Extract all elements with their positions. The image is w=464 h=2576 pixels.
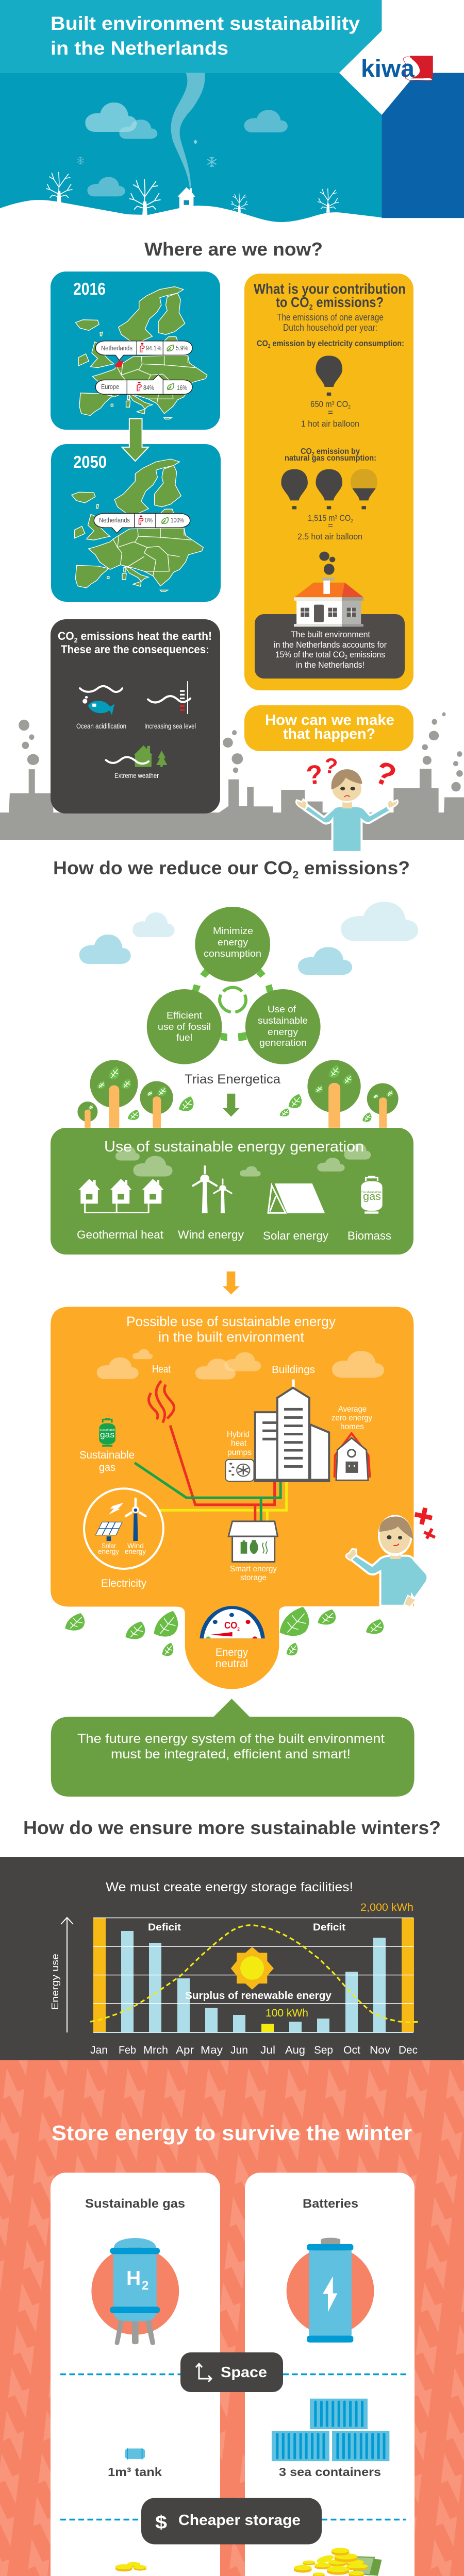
icon: sun — [231, 1947, 274, 1990]
axis: energy use: Energy use — [50, 1954, 60, 2010]
person with question marks: ? — [370, 754, 401, 794]
panel: consequences — [51, 619, 220, 814]
panel: 2050 map — [51, 444, 221, 602]
trias energetica diagram: energy — [218, 937, 248, 947]
panel: consequences: 2 — [74, 636, 78, 644]
callout: netherlands 2016: 84% — [143, 384, 154, 392]
month labels — [90, 2044, 418, 2056]
label: space — [180, 2352, 283, 2392]
label: cheaper storage: $ — [155, 2512, 167, 2533]
arrow: generation to use — [223, 1272, 240, 1294]
icon: ocean acidification — [80, 686, 122, 715]
gas emission: 2.5 hot air balloon — [297, 532, 362, 541]
panel: consequences: Increasing sea level — [144, 722, 196, 730]
callout: integrated efficient smart — [51, 1699, 415, 1797]
panel: possible use of sustainable energy: Energy — [216, 1647, 248, 1658]
callout: netherlands 2016: 94.1% — [146, 345, 161, 352]
heading: where are we now: Where are we now? — [144, 239, 323, 260]
panel: possible use of sustainable energy: Hybrid — [227, 1430, 250, 1439]
callout: integrated efficient smart: The future energy system of the built environment — [77, 1732, 385, 1746]
icon: electricity circle: energy — [125, 1548, 146, 1555]
person pointing up — [346, 1508, 435, 1607]
title: Built environment sustainability — [51, 13, 360, 34]
contribution heading: 2 — [309, 303, 313, 312]
callout: netherlands 2016 — [101, 345, 188, 392]
built environment box: in the Netherlands accounts for — [274, 640, 387, 650]
panel: possible use of sustainable energy: neutral — [216, 1658, 248, 1670]
contribution heading — [254, 281, 406, 312]
arrow: 2016 to 2050 — [122, 418, 148, 461]
panel: possible use of sustainable energy: homes — [340, 1422, 364, 1431]
person with question marks: ? — [323, 753, 339, 778]
built environment box: emissions — [347, 650, 385, 659]
month labels: Mrch — [143, 2044, 168, 2056]
dashed dividers — [60, 2374, 406, 2519]
callout: netherlands 2016: Europe — [101, 383, 119, 391]
label: cheaper storage — [141, 2498, 322, 2544]
panel: possible use of sustainable energy: Possible use of sustainable energy — [126, 1314, 336, 1329]
icon: gas bottle: Sustainable — [361, 1191, 382, 1194]
intro text: Dutch household per year: — [283, 323, 377, 333]
panel: sustainable energy generation: Solar energy — [263, 1229, 328, 1242]
panel: consequences: These are the consequences: — [61, 643, 209, 656]
header illustration — [0, 0, 464, 222]
gas emission: natural gas consumption: — [285, 454, 376, 463]
month labels: Feb — [119, 2044, 136, 2056]
electricity emission: CO — [257, 338, 270, 348]
electricity emission: 1 hot air balloon — [301, 419, 359, 429]
electricity emission — [257, 338, 404, 429]
panel: possible use of sustainable energy: storage — [240, 1573, 267, 1582]
trias energetica diagram: fuel — [176, 1032, 192, 1043]
panel: co2 contribution — [244, 274, 413, 690]
month labels: Dec — [399, 2044, 418, 2056]
built environment box: 15% of the total CO — [275, 650, 352, 659]
trias energetica diagram: Minimize — [213, 925, 253, 936]
panel: energy storage chart — [0, 1857, 464, 2060]
panel: possible use of sustainable energy: in the built environment — [158, 1329, 304, 1345]
panel: consequences: Extreme weather — [114, 772, 159, 779]
trias energetica diagram: use of fossil — [158, 1021, 211, 1032]
icon: green gas bottle: Sustainable — [100, 1429, 115, 1432]
icon: co2 gauge — [200, 1606, 265, 1638]
card: sustainable gas: 1m³ tank — [108, 2465, 162, 2479]
card: sustainable gas: Sustainable gas — [85, 2197, 185, 2211]
icon: coins small — [115, 2562, 146, 2571]
icon: electricity circle: Wind — [127, 1542, 144, 1550]
card: batteries — [245, 2173, 415, 2576]
panel: energy storage chart: We must create energy storage facilities! — [106, 1880, 353, 1894]
electricity emission: 2 — [268, 344, 271, 349]
callout: netherlands 2016: 5.9% — [176, 345, 188, 352]
panel: possible use of sustainable energy: Buildings — [272, 1364, 315, 1376]
panel: sustainable energy generation: Wind energy — [178, 1228, 244, 1241]
month labels: Nov — [370, 2044, 391, 2056]
icon: solar — [268, 1183, 325, 1213]
heading: reduce co2: emissions? — [299, 857, 410, 878]
panel: sustainable energy generation: Use of sustainable energy generation — [104, 1139, 364, 1155]
bar chart: Deficit — [313, 1922, 346, 1933]
month labels: Jun — [230, 2044, 248, 2056]
callout: netherlands 2016: 16% — [177, 384, 187, 392]
callout: how can we make that happen — [244, 705, 413, 751]
title — [51, 13, 360, 59]
panel: store energy: Store energy to survive the winter — [52, 2121, 412, 2145]
bar chart: Surplus of renewable energy — [185, 1990, 332, 2002]
panel: 2016 map — [51, 272, 220, 430]
person with question marks — [296, 753, 401, 852]
icon: electricity circle: Solar — [102, 1542, 116, 1550]
trias energetica diagram: Use of — [268, 1004, 296, 1014]
factory skyline — [0, 712, 464, 840]
icon: coins pile — [294, 2548, 382, 2576]
icon: gas bottle: gas — [363, 1191, 381, 1202]
callout: netherlands 2050: Netherlands — [99, 517, 130, 524]
icon: zero energy home — [335, 1433, 370, 1480]
energy lines — [135, 1426, 287, 1521]
panel: 2050 map: 2050 — [73, 452, 107, 471]
icon: sea level — [148, 681, 190, 714]
trias energetica diagram: energy — [268, 1026, 299, 1037]
panel: 2016 map: 2016 — [73, 279, 106, 298]
panel: possible use of sustainable energy — [51, 1307, 413, 1689]
panel: possible use of sustainable energy: Smart energy — [230, 1565, 277, 1573]
icon: extreme weather — [106, 745, 167, 767]
panel: possible use of sustainable energy: Heat — [152, 1364, 171, 1375]
trias energetica diagram — [147, 907, 321, 1087]
intro text — [277, 312, 384, 333]
icon: hydrogen tank: H — [126, 2267, 141, 2290]
bar chart: Deficit — [148, 1922, 181, 1933]
icon: buildings — [255, 1380, 329, 1481]
icon: gas bottle — [361, 1176, 383, 1214]
icon: electricity circle — [84, 1488, 163, 1569]
callout: how can we make that happen: How can we make — [265, 712, 394, 728]
panel: possible use of sustainable energy: Average — [338, 1405, 367, 1414]
icon: co2 gauge: 2 — [237, 1626, 240, 1632]
panel: sustainable energy generation: Geothermal heat — [77, 1228, 163, 1241]
contribution heading: to CO — [276, 294, 315, 310]
title: in the Netherlands — [51, 38, 228, 59]
icon: 1m3 tank — [125, 2448, 145, 2460]
heading: reduce co2: 2 — [292, 869, 299, 881]
electricity emission: 650 m³ CO — [310, 399, 353, 409]
panel: possible use of sustainable energy: pumps — [227, 1448, 252, 1457]
month labels: Apr — [176, 2044, 194, 2056]
month labels: Oct — [343, 2044, 360, 2056]
person with question marks: ? — [305, 759, 324, 791]
electricity emission: 2 — [348, 404, 351, 410]
month labels: Jan — [90, 2044, 108, 2056]
gas emission: emission by — [314, 447, 360, 456]
panel: possible use of sustainable energy: Electricity — [101, 1578, 146, 1589]
trees and leaves — [77, 1060, 399, 1128]
callout: how can we make that happen: that happen? — [283, 726, 375, 742]
icon: flames — [148, 1381, 174, 1422]
panel: possible use of sustainable energy: heat — [231, 1439, 247, 1448]
callout: netherlands 2050: 100% — [171, 517, 184, 524]
callout: integrated efficient smart: must be integrated, efficient and smart! — [111, 1747, 351, 1761]
card: batteries: Batteries — [303, 2197, 358, 2211]
heading: reduce co2: How do we reduce our CO — [53, 857, 284, 878]
bar chart — [90, 1918, 419, 2032]
label: space: Space — [221, 2364, 267, 2381]
icon: hydrogen tank — [91, 2238, 179, 2345]
card: sustainable gas — [51, 2173, 220, 2576]
icon: green gas bottle: gas — [100, 1431, 114, 1439]
built environment box: in the Netherlands! — [296, 660, 364, 670]
contribution heading: What is your contribution — [254, 281, 406, 297]
icon: green gas bottle — [99, 1418, 115, 1447]
built environment box: 2 — [345, 655, 347, 660]
panel: consequences: emissions heat the earth! — [78, 630, 212, 642]
gas emission: = — [328, 521, 333, 531]
month labels: May — [201, 2044, 223, 2056]
panel: possible use of sustainable energy: zero energy — [332, 1414, 372, 1422]
gas emission: 2 — [351, 518, 353, 524]
electricity emission: = — [328, 408, 333, 417]
month labels: Sep — [314, 2044, 333, 2056]
trias energetica diagram: generation — [259, 1037, 307, 1048]
icon: heat pump — [225, 1460, 254, 1481]
panel: possible use of sustainable energy: Sustainable — [79, 1449, 135, 1461]
month labels: Jul — [260, 2044, 275, 2056]
electricity emission: emission by electricity consumption: — [270, 338, 404, 348]
trias energetica diagram: Efficient — [167, 1010, 202, 1021]
gas emission: 2 — [312, 451, 314, 457]
panel: consequences: CO — [58, 630, 75, 642]
panel: sustainable energy generation: Biomass — [347, 1229, 391, 1242]
gas emission: 1,515 m³ CO — [308, 513, 358, 523]
leaves around gauge — [65, 1607, 384, 1656]
icon: house — [294, 578, 363, 626]
heading: sustainable winters: How do we ensure more sustainable winters? — [23, 1817, 441, 1838]
panel: sustainable energy generation — [51, 1128, 413, 1255]
callout: netherlands 2050 — [99, 517, 184, 524]
icon: electricity circle: energy — [98, 1548, 119, 1555]
month labels: Aug — [285, 2044, 305, 2056]
icon: battery — [287, 2238, 374, 2343]
callout: netherlands 2016: Netherlands — [101, 345, 132, 352]
label: cheaper storage: Cheaper storage — [178, 2512, 301, 2529]
icon: smart energy storage — [228, 1521, 277, 1562]
icon: co2 gauge: CO — [224, 1620, 238, 1631]
panel: possible use of sustainable energy: gas — [99, 1462, 115, 1473]
trias energetica diagram: consumption — [204, 948, 261, 959]
gas emission: CO — [301, 447, 313, 456]
trias energetica diagram: sustainable — [258, 1015, 308, 1026]
icon: sea containers — [272, 2399, 389, 2461]
intro text: The emissions of one average — [277, 312, 384, 323]
panel: store energy — [0, 2060, 464, 2576]
chimney smoke — [319, 552, 335, 575]
arrow: trias to generation — [223, 1094, 240, 1116]
trias energetica diagram: Trias Energetica — [185, 1072, 280, 1087]
icon: geothermal — [78, 1179, 163, 1213]
icon: wind — [193, 1166, 231, 1213]
built environment box — [255, 614, 405, 679]
callout: netherlands 2050: 0% — [145, 517, 153, 524]
gas emission — [281, 447, 377, 541]
clouds over trias — [79, 902, 418, 975]
built environment box: The built environment — [291, 630, 370, 639]
bar chart: 100 kWh — [266, 2007, 308, 2019]
icon: hydrogen tank: 2 — [142, 2279, 148, 2293]
card: batteries: 3 sea containers — [279, 2465, 381, 2479]
panel: consequences: Ocean acidification — [76, 722, 126, 730]
contribution heading: emissions? — [313, 294, 384, 310]
axis: energy use — [50, 1918, 73, 2032]
kiwa logo top: kiwa — [361, 55, 415, 82]
panel: energy storage chart: 2,000 kWh — [360, 1902, 413, 1913]
pale clouds — [115, 1143, 371, 1177]
